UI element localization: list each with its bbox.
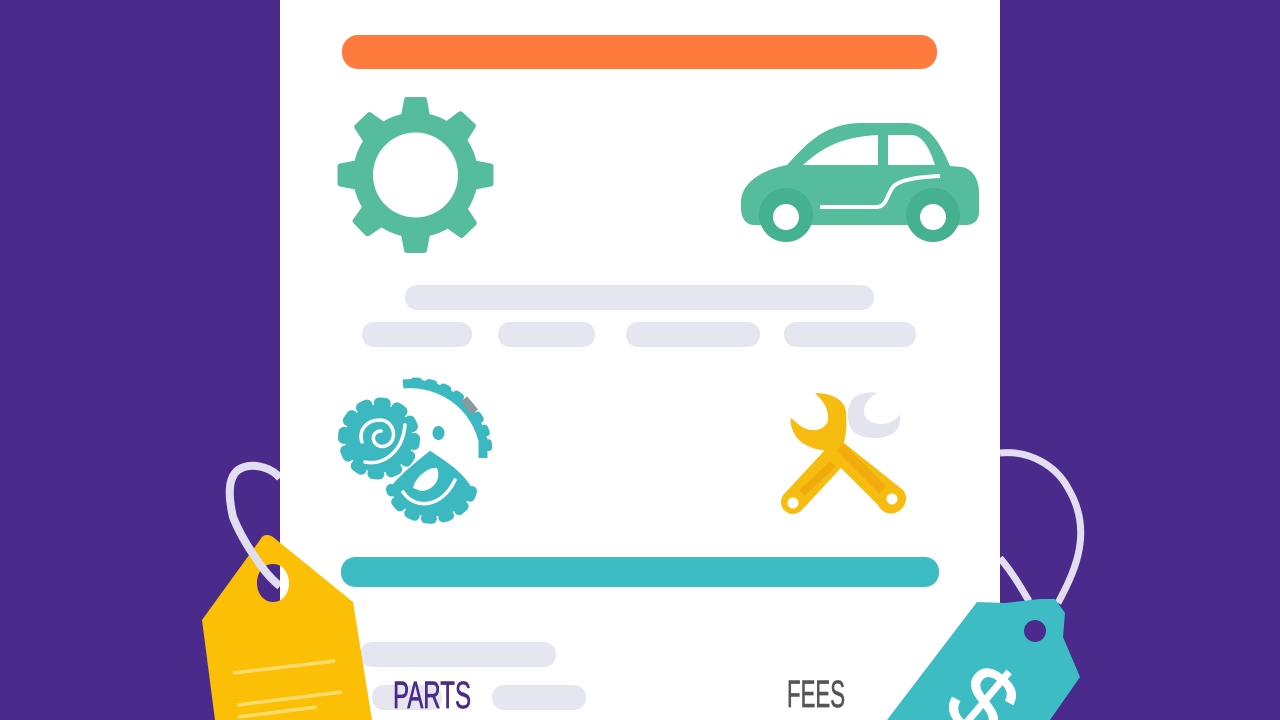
teal price tag <box>887 453 1081 720</box>
grey placeholder text lines, lower <box>360 642 586 710</box>
small gear dot <box>432 426 444 440</box>
panel: paper document <box>280 0 1000 720</box>
infographic canvas <box>202 0 1084 720</box>
tag string <box>1000 453 1081 603</box>
tag body <box>887 599 1080 720</box>
tag text lines <box>233 661 342 717</box>
yellow price tag <box>202 466 372 720</box>
upper arc gear fragment <box>403 381 489 458</box>
lower sector gear <box>391 452 472 519</box>
main yellow wrench <box>791 393 906 514</box>
second yellow handle <box>793 460 832 502</box>
orange header bar <box>342 35 937 69</box>
grey placeholder text lines, upper <box>362 285 916 347</box>
tag string <box>230 466 280 586</box>
left swirl gear <box>344 403 414 474</box>
grey wrench head <box>848 392 900 438</box>
tag body <box>202 535 372 720</box>
icon: crossed wrenches <box>788 392 906 514</box>
label: PARTS: PARTS <box>393 675 471 717</box>
teal divider bar <box>341 557 939 587</box>
icon: green gear <box>340 100 490 250</box>
label: FEES: FEES <box>787 674 845 716</box>
icon: teal broken gears <box>344 381 489 519</box>
icon: green car <box>741 123 979 242</box>
